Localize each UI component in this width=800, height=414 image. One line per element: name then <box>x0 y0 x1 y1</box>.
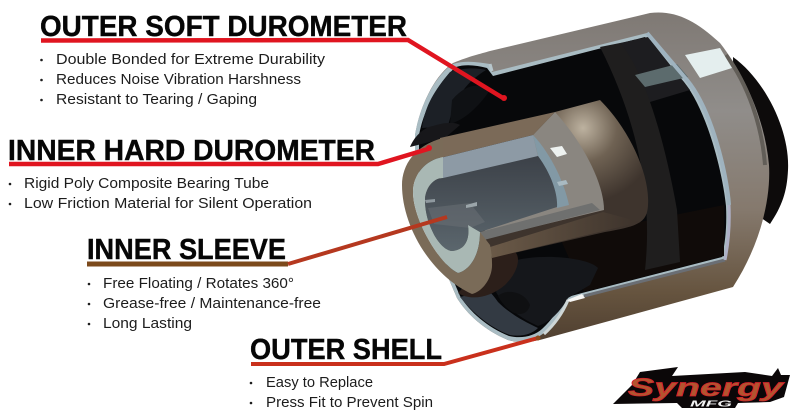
section: outer shell <box>250 334 442 411</box>
shell interior <box>415 33 730 342</box>
bullet list <box>40 51 326 108</box>
bullet list: Double Bonded for Extreme Durability <box>56 51 326 68</box>
heading: OUTER SOFT DUROMETER <box>40 11 407 43</box>
heading: INNER SLEEVE <box>87 234 286 266</box>
shell lip details <box>490 33 729 334</box>
bullet list <box>88 275 321 332</box>
bullet list: Resistant to Tearing / Gaping <box>56 91 257 108</box>
logo: Synergy MFG: MFG <box>690 400 732 408</box>
section: inner hard durometer <box>8 135 375 212</box>
logo: Synergy MFG: Synergy <box>628 374 785 402</box>
bullet list: Reduces Noise Vibration Harshness <box>56 71 301 88</box>
heading: INNER HARD DUROMETER <box>8 135 375 167</box>
bullet list: Rigid Poly Composite Bearing Tube <box>24 175 269 192</box>
logo: Synergy MFG <box>613 367 790 408</box>
bullet list <box>9 175 312 212</box>
callout line: outer shell <box>251 336 540 364</box>
outer shell <box>415 12 769 342</box>
bullet list: Grease-free / Maintenance-free <box>103 295 321 312</box>
inner sleeve bore <box>425 156 557 251</box>
callout line: inner hard durometer <box>9 145 432 164</box>
bullet list: Long Lasting <box>103 315 192 332</box>
bullet list: Free Floating / Rotates 360° <box>103 275 294 292</box>
section: inner sleeve <box>87 234 321 332</box>
inner hard durometer tube <box>410 100 648 297</box>
heading: OUTER SHELL <box>250 334 442 366</box>
bullet list: Press Fit to Prevent Spin <box>266 394 433 411</box>
bushing cutaway illustration <box>402 12 788 342</box>
rubber pockets <box>422 68 598 336</box>
callout line: inner sleeve <box>87 217 447 264</box>
front face rings <box>402 138 492 294</box>
bullet list: Low Friction Material for Silent Operation <box>24 195 312 212</box>
callout line: outer soft durometer <box>41 40 507 101</box>
rear black bump <box>733 57 788 224</box>
bullet list <box>250 374 433 411</box>
section: outer soft durometer <box>40 11 407 108</box>
bullet list: Easy to Replace <box>266 374 373 391</box>
